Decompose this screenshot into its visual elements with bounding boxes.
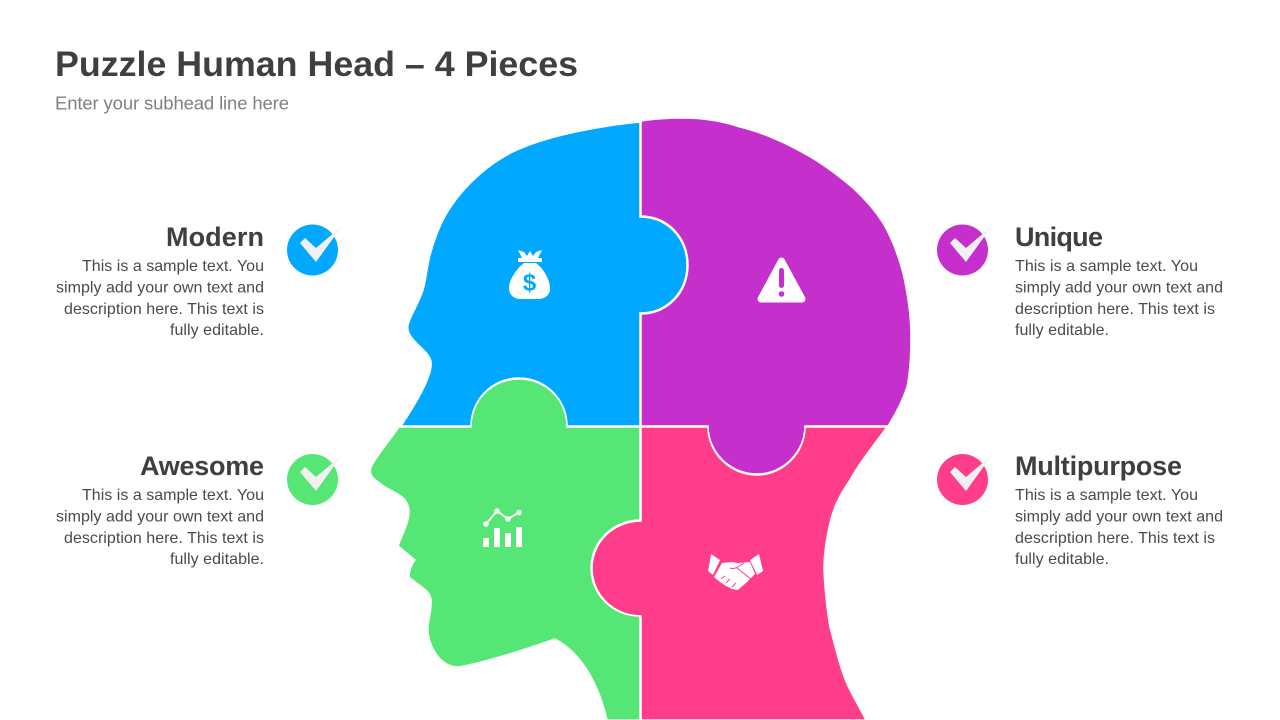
text block: Multipurpose description: fully editable.	[1015, 551, 1109, 568]
icon: line and bar chart	[483, 508, 522, 547]
text block: Unique description: description here. This text is	[1015, 301, 1215, 318]
text block: Multipurpose description: description here. This text is	[1015, 530, 1215, 547]
icon: money bag: $	[523, 270, 537, 296]
check icon: pink	[937, 454, 992, 505]
text block: Awesome description: fully editable.	[170, 551, 264, 568]
text block: Multipurpose description: This is a sample text. You	[1015, 487, 1198, 504]
puzzle piece: pink	[592, 427, 887, 720]
text block: Awesome description: simply add your own text and	[56, 508, 264, 526]
item: Unique	[1015, 222, 1223, 339]
item: Awesome	[56, 451, 264, 568]
check icon: green	[287, 454, 342, 505]
check icon: blue	[287, 224, 342, 276]
text block: Multipurpose description: simply add your own text and	[1015, 508, 1223, 526]
text block: Awesome description: description here. This text is	[64, 530, 264, 547]
text block: Modern description: fully editable.	[170, 322, 264, 339]
text block: Modern description: description here. This text is	[64, 301, 264, 318]
text block: Modern description: simply add your own text and	[56, 280, 264, 296]
icon: money bag	[509, 250, 550, 299]
text block: Modern description	[56, 258, 264, 339]
text block: Modern description: This is a sample text. You	[82, 258, 264, 275]
icon: warning triangle	[761, 261, 802, 299]
heading: Multipurpose: Multipurpose	[1015, 451, 1182, 481]
heading: Awesome: Awesome	[140, 451, 264, 481]
heading: Unique: Unique	[1015, 222, 1103, 252]
puzzle head	[370, 118, 911, 720]
subhead: Enter your subhead line here	[55, 92, 289, 114]
puzzle piece: blue	[401, 122, 687, 426]
item: Multipurpose	[1015, 451, 1223, 568]
title: Puzzle Human Head – 4 Pieces	[55, 45, 578, 84]
puzzle piece: purple	[641, 118, 911, 474]
item: Modern	[56, 222, 264, 339]
text block: Unique description: fully editable.	[1015, 322, 1109, 339]
icon: handshake	[708, 554, 763, 590]
text block: Unique description: simply add your own text and	[1015, 280, 1223, 296]
text block: Awesome description	[56, 487, 264, 568]
text block: Multipurpose description	[1015, 487, 1223, 568]
text block: Unique description: This is a sample text. You	[1015, 258, 1198, 275]
heading: Modern: Modern	[166, 222, 264, 252]
text block: Awesome description: This is a sample text. You	[82, 487, 264, 504]
puzzle piece: green	[370, 379, 640, 720]
text block: Unique description	[1015, 258, 1223, 339]
check icon: purple	[937, 224, 992, 276]
